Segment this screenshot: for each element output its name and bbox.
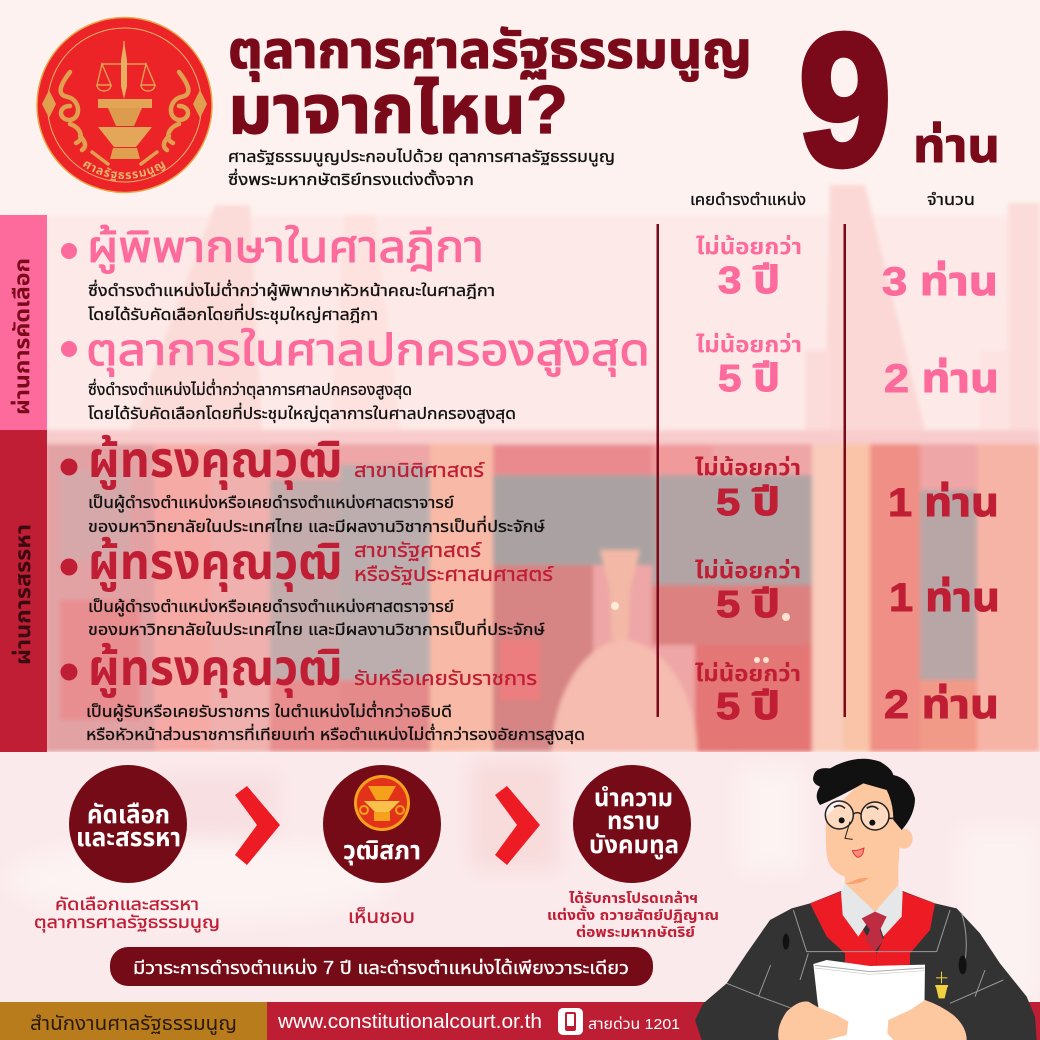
item: Supreme Court judges: ซึ่งดำรงตำแหน่งไม่ต่ำกว่าผู้พิพากษาหัวหน้าคณะในศาลฎีกา (88, 279, 495, 300)
step 1: select and nominate (69, 765, 187, 883)
count column: 2 ท่าน (884, 682, 999, 727)
title: มาจากไหน? (228, 72, 568, 148)
item: civil service experts: รับหรือเคยรับราชการ (354, 668, 537, 690)
total count: 9 judges (799, 0, 1000, 204)
caption step 3: ต่อพระมหากษัตริย์ (576, 924, 695, 941)
item: Supreme Court judges: ผู้พิพากษาในศาลฎีกา (87, 223, 484, 274)
item: civil service experts: เป็นผู้รับหรือเคยรับราชการ ในตำแหน่งไม่ต่ำกว่าอธิบดี (86, 700, 452, 721)
experience column: 5 ปี (716, 686, 780, 728)
item: law experts (60, 432, 545, 536)
item: political science experts: หรือรัฐประศาสนศาสตร์ (354, 564, 554, 586)
footer: www.constitutionalcourt.or.th (277, 1011, 542, 1033)
item: law experts: สาขานิติศาสตร์ (354, 460, 485, 482)
item: political science experts: ของมหาวิทยาลัยในประเทศไทย และมีผลงานวิชาการเป็นที่ประจักษ์ (88, 618, 545, 639)
item: civil service experts: หรือหัวหน้าส่วนราชการที่เทียบเท่า หรือตำแหน่งไม่ต่ำกว่ารองอัยการสูงสุด (86, 723, 585, 744)
total count: 9 judges: ท่าน (913, 119, 1000, 172)
column headers: จำนวน (927, 192, 975, 209)
phone icon (558, 1008, 583, 1035)
caption step 3: ได้รับการโปรดเกล้าฯ (569, 891, 698, 907)
step 3: royal submission (573, 765, 691, 883)
experience column: ไม่น้อยกว่า (696, 332, 802, 357)
experience column: 5 ปี (716, 584, 780, 626)
robe emblem (935, 972, 948, 998)
experience column: 5 ปี (716, 482, 780, 524)
seal text: ศาลรัฐธรรมนูญ (82, 161, 166, 181)
count column (882, 259, 1000, 727)
court emblem seal (36, 16, 213, 194)
experience column (695, 234, 802, 728)
experience column: ไม่น้อยกว่า (696, 234, 802, 259)
item: Supreme Administrative Court judges: โดยได้รับคัดเลือกโดยที่ประชุมใหญ่ตุลาการในศาลปกครองสูงสุด (88, 402, 516, 423)
item: Supreme Court judges: โดยได้รับคัดเลือกโดยที่ประชุมใหญ่ศาลฎีกา (88, 303, 378, 324)
item: Supreme Court judges (61, 223, 495, 324)
intro text (228, 149, 615, 189)
column dividers (656, 224, 846, 717)
step 3: royal submission: นำความ (594, 784, 673, 812)
term note pill: มีวาระการดำรงตำแหน่ง 7 ปี และดำรงตำแหน่งได้เพียงวาระเดียว (133, 958, 629, 978)
item: civil service experts: ผู้ทรงคุณวุฒิ (88, 640, 342, 698)
experience column: 5 ปี (718, 358, 780, 400)
intro text: ศาลรัฐธรรมนูญประกอบไปด้วย ตุลาการศาลรัฐธรรมนูญ (228, 149, 615, 166)
count column: 3 ท่าน (882, 259, 998, 304)
item: law experts: เป็นผู้ดำรงตำแหน่งหรือเคยดำรงตำแหน่งศาสตราจารย์ (88, 494, 454, 512)
step 1: select and nominate: และสรรหา (76, 822, 181, 852)
step 2: Senate (323, 765, 441, 883)
item: law experts: ของมหาวิทยาลัยในประเทศไทย และมีผลงานวิชาการเป็นที่ประจักษ์ (88, 515, 545, 536)
intro text: ซึ่งพระมหากษัตริย์ทรงแต่งตั้งจาก (228, 168, 474, 189)
footer: สายด่วน 1201 (588, 1015, 680, 1033)
arrow 1 (235, 786, 280, 865)
experience column: ไม่น้อยกว่า (695, 558, 801, 583)
item: Supreme Administrative Court judges: ตุลาการในศาลปกครองสูงสุด (86, 326, 650, 377)
side tab: nomination (0, 430, 47, 752)
total count: 9 judges: 9 (799, 0, 891, 204)
footer (0, 1002, 1040, 1040)
item: civil service experts (60, 640, 585, 744)
footer: สำนักงานศาลรัฐธรรมนูญ (30, 1013, 237, 1036)
caption step 1 (34, 895, 220, 934)
experience column: ไม่น้อยกว่า (695, 661, 801, 686)
side tab: selection (0, 215, 47, 430)
count column: 2 ท่าน (884, 356, 999, 401)
caption step 3 (547, 891, 719, 941)
lights (611, 602, 790, 663)
caption step 1: คัดเลือกและสรรหา (55, 895, 199, 914)
senate seal (354, 775, 410, 831)
item: political science experts: เป็นผู้ดำรงตำแหน่งหรือเคยดำรงตำแหน่งศาสตราจารย์ (88, 598, 454, 616)
item: Supreme Administrative Court judges (61, 326, 650, 423)
step 2: Senate: วุฒิสภา (343, 835, 421, 866)
step 1: select and nominate: คัดเลือก (87, 799, 170, 829)
title: ตุลาการศาลรัฐธรรมนูญ (228, 22, 752, 82)
term note pill (110, 947, 653, 986)
count column: 1 ท่าน (889, 575, 1000, 620)
experience column: ไม่น้อยกว่า (695, 455, 801, 480)
column headers: เคยดำรงตำแหน่ง (690, 191, 806, 209)
item: political science experts (60, 534, 554, 639)
side tab: selection: ผ่านการคัดเลือก (11, 258, 34, 415)
experience column: 3 ปี (718, 260, 780, 302)
arrow 2 (495, 786, 540, 865)
title (228, 22, 752, 148)
side tab: nomination: ผ่านการสรรหา (12, 524, 35, 665)
step 3: royal submission: บังคมทูล (589, 831, 679, 860)
count column: 1 ท่าน (888, 480, 999, 525)
caption step 3: แต่งตั้ง ถวายสัตย์ปฏิญาณ (547, 905, 719, 924)
character: judge in robe holding papers (695, 759, 1037, 1040)
column headers (690, 191, 975, 209)
item: Supreme Administrative Court judges: ซึ่งดำรงตำแหน่งไม่ต่ำกว่าตุลาการศาลปกครองสูงสุด (88, 378, 412, 399)
caption step 1: ตุลาการศาลรัฐธรรมนูญ (34, 913, 220, 934)
item: political science experts: ผู้ทรงคุณวุฒิ (88, 534, 342, 592)
item: political science experts: สาขารัฐศาสตร์ (354, 540, 482, 562)
caption step 2: เห็นชอบ (348, 907, 415, 928)
step 3: royal submission: ทราบ (607, 807, 660, 835)
item: law experts: ผู้ทรงคุณวุฒิ (88, 432, 342, 490)
